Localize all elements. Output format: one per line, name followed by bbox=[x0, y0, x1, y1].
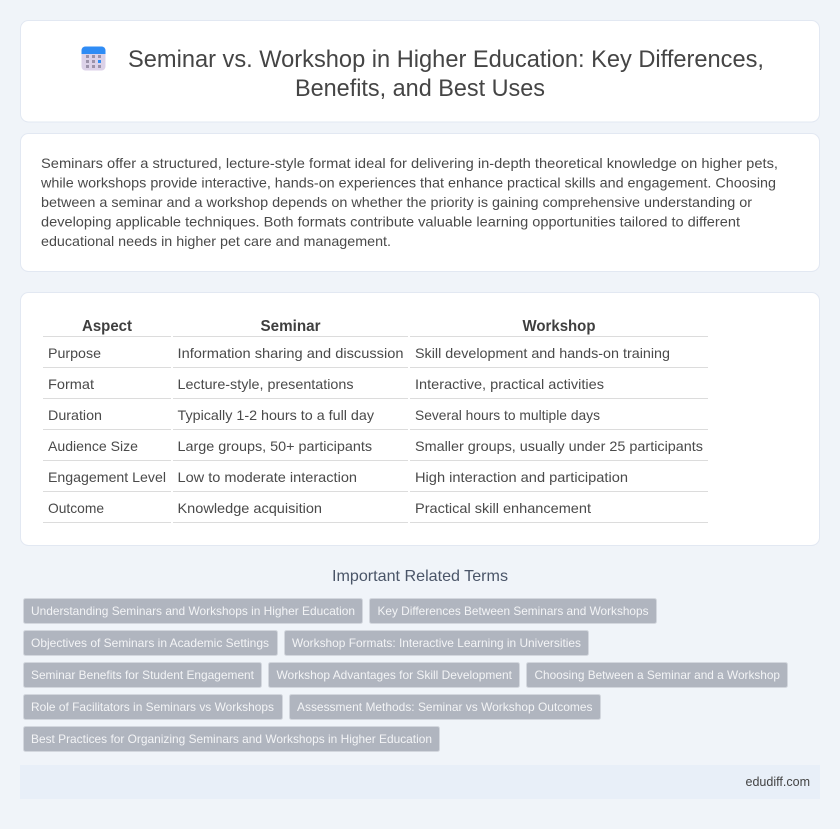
intro text bbox=[40, 155, 778, 249]
row: format: Interactive, practical activities bbox=[415, 376, 604, 392]
row: purpose: Skill development and hands-on training bbox=[415, 345, 670, 361]
icon: calendar bbox=[82, 46, 106, 70]
row: duration bbox=[48, 407, 600, 423]
row: outcome: Knowledge acquisition bbox=[178, 500, 322, 516]
tag: Role of Facilitators in Seminars vs Workshops bbox=[31, 700, 274, 714]
row: duration: Several hours to multiple days bbox=[415, 407, 600, 423]
tag bbox=[24, 726, 440, 752]
panel: header bbox=[20, 20, 820, 122]
row: outcome: Practical skill enhancement bbox=[415, 500, 591, 516]
row: engagement level: Engagement Level bbox=[48, 469, 166, 485]
intro text: educational needs in higher pet care and management. bbox=[41, 233, 391, 249]
table header bbox=[82, 318, 596, 335]
tag: Assessment Methods: Seminar vs Workshop Outcomes bbox=[297, 700, 592, 714]
heading: related terms: Important Related Terms bbox=[332, 568, 508, 585]
row: duration: Duration bbox=[48, 407, 102, 423]
tag bbox=[370, 598, 656, 624]
row: purpose: Purpose bbox=[48, 345, 101, 361]
row: format: Lecture-style, presentations bbox=[178, 376, 354, 392]
tag: Choosing Between a Seminar and a Workshop bbox=[534, 668, 780, 682]
tag bbox=[290, 694, 600, 720]
row: format: Format bbox=[48, 376, 94, 392]
title: Benefits, and Best Uses bbox=[295, 75, 545, 102]
tag bbox=[284, 630, 588, 656]
intro text: developing applicable techniques. Both formats contribute valuable learning opportunities tailored to different bbox=[41, 214, 740, 230]
footer bbox=[20, 765, 820, 799]
tag: Workshop Advantages for Skill Development bbox=[276, 668, 513, 682]
panel: comparison table bbox=[20, 292, 820, 546]
row: purpose: Information sharing and discussion bbox=[178, 345, 404, 361]
table header: Workshop bbox=[522, 318, 596, 335]
intro text: between a seminar and a workshop depends on whether the priority is gaining comprehensive understanding or bbox=[41, 194, 752, 210]
row: audience size: Large groups, 50+ participants bbox=[178, 438, 372, 454]
table header: Seminar bbox=[260, 318, 320, 335]
table header: Aspect bbox=[82, 318, 133, 335]
title: Seminar vs. Workshop in Higher Education: Key Differences, bbox=[128, 46, 764, 73]
tag bbox=[24, 598, 362, 624]
tag bbox=[24, 630, 278, 656]
tag: Best Practices for Organizing Seminars and Workshops in Higher Education bbox=[31, 732, 432, 746]
footer brand: edudiff.com bbox=[746, 774, 810, 789]
tag: Key Differences Between Seminars and Workshops bbox=[378, 604, 648, 618]
row: engagement level bbox=[48, 469, 628, 485]
tag: Objectives of Seminars in Academic Settings bbox=[31, 636, 269, 650]
intro text: Seminars offer a structured, lecture-style format ideal for delivering in-depth theoretical knowledge on higher pets, bbox=[41, 155, 778, 171]
tag: Workshop Formats: Interactive Learning in Universities bbox=[292, 636, 581, 650]
row: outcome: Outcome bbox=[48, 500, 104, 516]
tag bbox=[268, 662, 520, 688]
tags: related terms bbox=[24, 598, 788, 752]
tag: Understanding Seminars and Workshops in Higher Education bbox=[31, 604, 355, 618]
row: audience size: Smaller groups, usually under 25 participants bbox=[415, 438, 703, 454]
row: format bbox=[48, 376, 604, 392]
row: audience size bbox=[48, 438, 703, 454]
tag bbox=[526, 662, 788, 688]
row: engagement level: High interaction and participation bbox=[415, 469, 628, 485]
row: audience size: Audience Size bbox=[48, 438, 138, 454]
tag: Seminar Benefits for Student Engagement bbox=[31, 668, 255, 682]
tag bbox=[24, 662, 262, 688]
row: purpose bbox=[48, 345, 670, 361]
panel: introduction bbox=[20, 134, 820, 272]
title bbox=[128, 46, 764, 102]
intro text: while workshops provide interactive, hands-on experiences that enhance practical skills and engagement. Choosing bbox=[40, 174, 776, 190]
tag bbox=[24, 694, 282, 720]
row: duration: Typically 1-2 hours to a full day bbox=[178, 407, 374, 423]
row: engagement level: Low to moderate interaction bbox=[178, 469, 357, 485]
row: outcome bbox=[48, 500, 591, 516]
